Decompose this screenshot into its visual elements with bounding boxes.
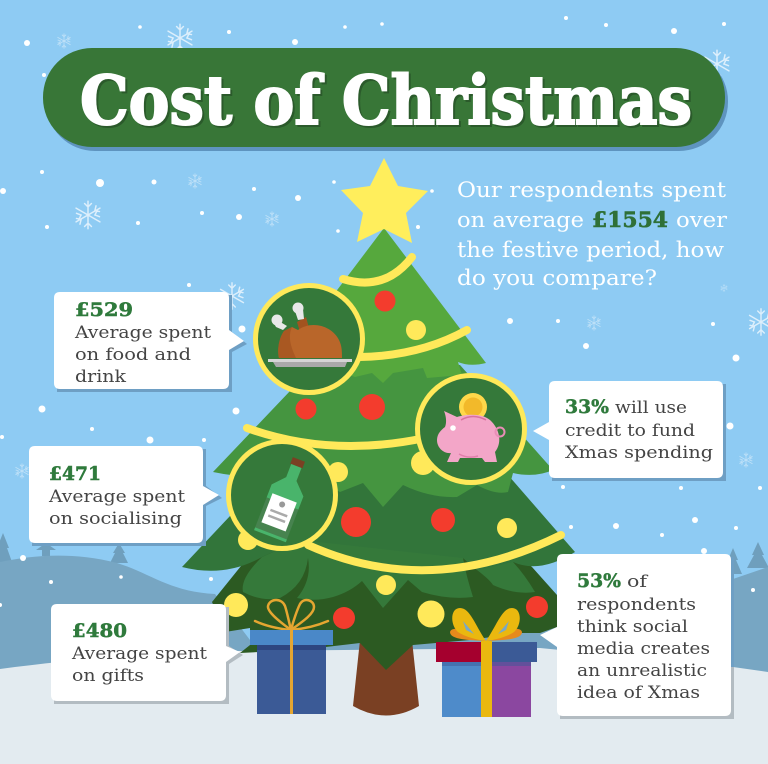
tree tier 3	[182, 440, 575, 571]
callout: socialising: £471	[49, 463, 101, 485]
callout: credit: Xmas spending	[565, 443, 713, 463]
intro text: £1554	[592, 207, 668, 232]
trunk	[353, 640, 419, 716]
intro text: do you compare?	[457, 266, 657, 290]
right gift	[436, 608, 537, 717]
callout: social media: respondents	[577, 595, 696, 615]
gift bow	[255, 600, 328, 630]
title banner	[43, 48, 728, 151]
callout: gifts: £480	[72, 620, 127, 642]
icon: piggy bank	[418, 376, 524, 482]
snowflakes	[16, 24, 768, 478]
ornaments behind icons	[238, 451, 435, 550]
christmas tree	[182, 158, 575, 716]
tree lower scallops	[243, 540, 535, 608]
callout: food and drink: drink	[75, 367, 127, 387]
title text: Cost of Christmas	[80, 61, 692, 140]
snow dots	[0, 16, 762, 581]
tree tier 4 darkest	[212, 530, 557, 670]
callout: social media: think social	[577, 617, 688, 637]
star	[341, 158, 428, 243]
left gift	[250, 600, 333, 714]
icon: turkey	[256, 286, 362, 392]
tree tier 1 top	[282, 228, 486, 383]
callout: social media: media creates	[577, 639, 710, 659]
intro text: Our respondents spent	[457, 178, 727, 202]
icon: bottle	[228, 442, 336, 548]
callout: gifts: on gifts	[72, 666, 144, 686]
callout: credit: will use	[615, 398, 687, 418]
callout: socialising: on socialising	[49, 509, 182, 529]
callout: gifts: Average spent	[71, 644, 207, 664]
callout: socialising	[29, 446, 222, 546]
callout: food and drink	[54, 292, 247, 392]
background pine trees	[0, 533, 768, 574]
callout: social media	[540, 554, 734, 719]
callout: food and drink: £529	[75, 299, 133, 321]
callout: social media: idea of Xmas	[577, 683, 700, 703]
title text: Cost of Christmas	[82, 63, 694, 142]
callout: social media: an unrealistic	[577, 661, 707, 681]
callout: social media: 53%	[577, 570, 621, 592]
callout: credit	[533, 381, 726, 481]
callout: food and drink: Average spent	[74, 323, 211, 343]
intro text	[457, 178, 728, 290]
callout: credit: credit to fund	[565, 421, 695, 441]
callout: food and drink: on food and	[75, 345, 191, 365]
callout: social media: of	[627, 572, 649, 592]
banner pill	[43, 48, 728, 151]
intro text: over	[676, 208, 728, 232]
callout: gifts	[51, 604, 243, 704]
callout: credit: 33%	[565, 396, 609, 418]
garlands	[247, 257, 561, 570]
background hills	[0, 556, 768, 690]
callout: socialising: Average spent	[48, 487, 185, 507]
gift bow	[450, 608, 522, 641]
tree tier 2	[213, 365, 553, 507]
dots on hills	[0, 555, 755, 607]
intro text: on average	[457, 208, 584, 232]
ornaments	[224, 290, 548, 629]
intro text: the festive period, how	[457, 238, 724, 262]
snow ground	[0, 648, 768, 764]
